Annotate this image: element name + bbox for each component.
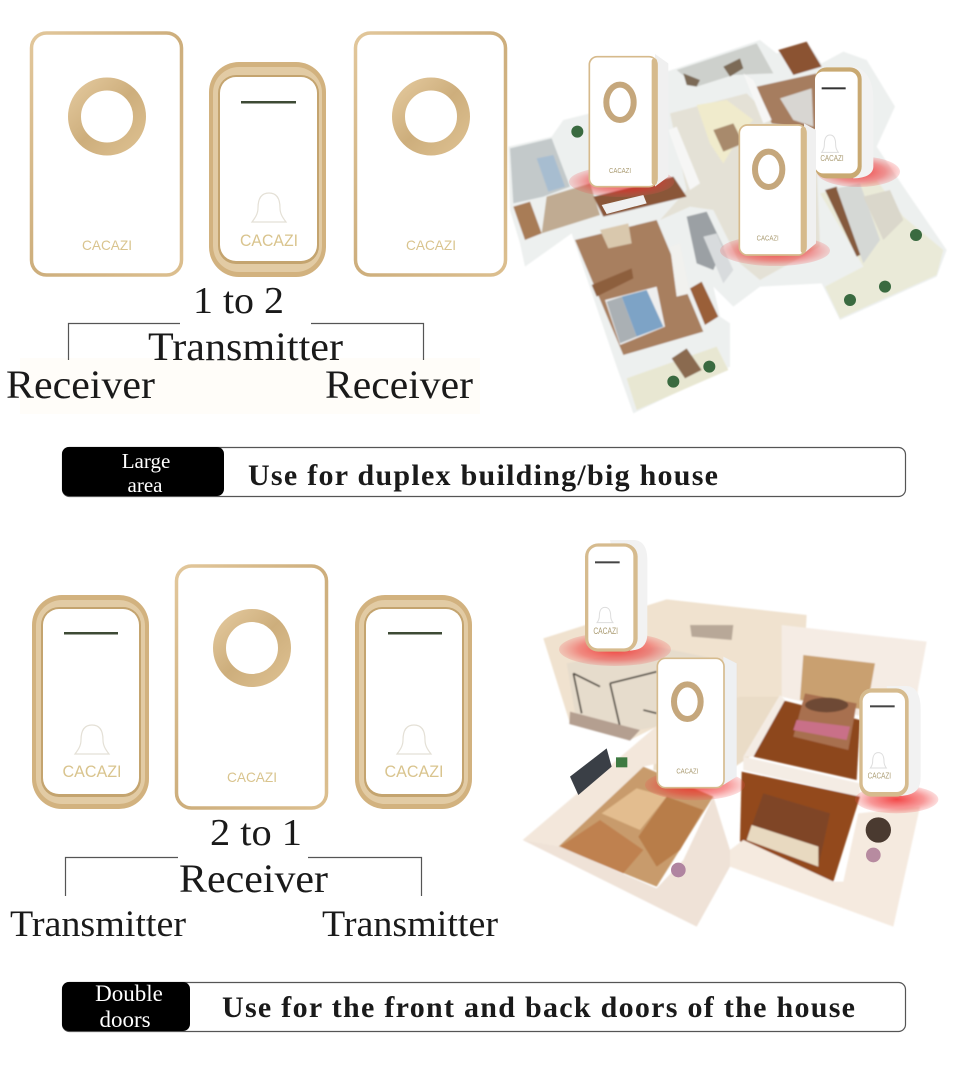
chairs [600,223,632,248]
pairing label 1 to 2: 1 to 2 [193,280,284,322]
master bedroom floor [575,220,703,355]
red area centre [720,235,830,266]
bed cover [793,720,850,740]
kitchen front wall [569,712,640,741]
wall strip [743,757,860,797]
upper bed [793,693,857,750]
bath small [687,212,723,270]
red area top left [559,633,671,666]
plant right 3 [910,229,922,241]
transmitter bottom right: CACAZI [384,762,444,781]
rooms [523,599,927,927]
transmitter top centre [209,62,326,277]
label transmitter left: Transmitter [10,904,186,945]
wall tv [570,748,612,795]
upper bedroom floor [753,700,860,780]
green picture [616,757,627,767]
bedroom back wall [782,625,927,743]
device bell right: CACAZI [820,153,844,163]
plants right [844,294,856,306]
transmitter bottom right [355,595,472,809]
badge text: Large [122,449,170,473]
kitchen right [820,180,943,318]
walls base [508,40,947,413]
flowers centre [671,863,686,877]
transmitter top centre: CACAZI [240,231,298,250]
device bell top [585,540,647,652]
wardrobe [690,282,718,325]
pairing label 2 to 1: 2 to 1 [210,812,302,854]
device bell right [815,67,873,178]
kitchen floor [567,647,737,732]
badge text: Double [95,981,163,1006]
table [602,788,667,830]
badge text second line: area [128,473,163,497]
back walls and kitchen [543,599,807,740]
device ring left [589,54,668,187]
shelf [690,625,733,640]
bed [605,287,665,345]
device ring centre: CACAZI [757,234,779,243]
red area left [569,166,674,197]
receiver top right [356,33,506,275]
label transmitter: Transmitter [148,324,343,369]
label receiver left: Receiver [6,362,155,407]
label receiver: Receiver [179,856,328,901]
receiver top right: CACAZI [406,237,456,253]
flowers right [866,817,891,843]
living room rug [697,100,753,163]
plants bottom [667,376,679,388]
inner walls [668,127,700,190]
glass partitions [573,672,657,727]
balcony bottom [627,347,728,410]
right wing wall and front [730,807,920,927]
red area centre [645,770,745,800]
device bell right: CACAZI [868,771,891,781]
receiver top left [32,33,182,275]
dark corridor [593,177,687,217]
device ring left: CACAZI [609,166,631,175]
banner message: Use for the front and back doors of the house [222,991,855,1024]
banner double doors [62,981,906,1032]
upper bed pillows [805,698,848,712]
red area right [817,156,900,187]
study top [677,43,773,87]
receiver top left: CACAZI [82,237,132,253]
sofa strip [602,195,647,214]
plant right 2 [879,281,891,293]
bathroom [510,138,570,203]
upper bedroom [778,42,822,75]
transmitter bottom left [32,595,149,809]
banner large area [62,447,906,497]
side wall strip [743,695,785,757]
living room floor [558,767,713,887]
headboard [800,655,875,710]
badge text second line: doors [99,1007,151,1032]
device ring centre [657,657,737,788]
tv unit [670,243,690,297]
receiver bottom centre: CACAZI [227,769,277,785]
cream text backdrop [20,358,480,414]
rug [560,820,643,873]
badge [62,447,224,496]
badge [62,982,190,1031]
device bell right [859,686,921,797]
floor plan illustration [508,40,947,413]
label transmitter right: Transmitter [322,904,498,945]
label receiver right: Receiver [325,362,473,407]
transmitter bottom left: CACAZI [62,762,122,781]
device ring centre: CACAZI [676,766,698,775]
lower bedroom floor [740,772,860,882]
hallway [660,93,820,280]
plant left [571,126,583,138]
bench [592,268,633,297]
hall [653,697,782,783]
device ring centre [739,123,816,255]
banner message: Use for duplex building/big house [248,459,718,492]
lower bed [747,793,830,867]
bracket top [68,324,424,360]
flowers right pink [866,848,881,862]
left wall [523,726,658,847]
red area right [855,785,938,813]
house illustration [523,540,938,927]
lower bed linen [747,825,818,867]
plant bottom right [703,361,715,373]
device bell top: CACAZI [593,626,618,636]
receiver bottom centre [176,566,326,808]
bracket bottom [66,858,422,896]
sofa [638,797,703,867]
rooms [508,40,947,413]
front wall [523,797,730,927]
